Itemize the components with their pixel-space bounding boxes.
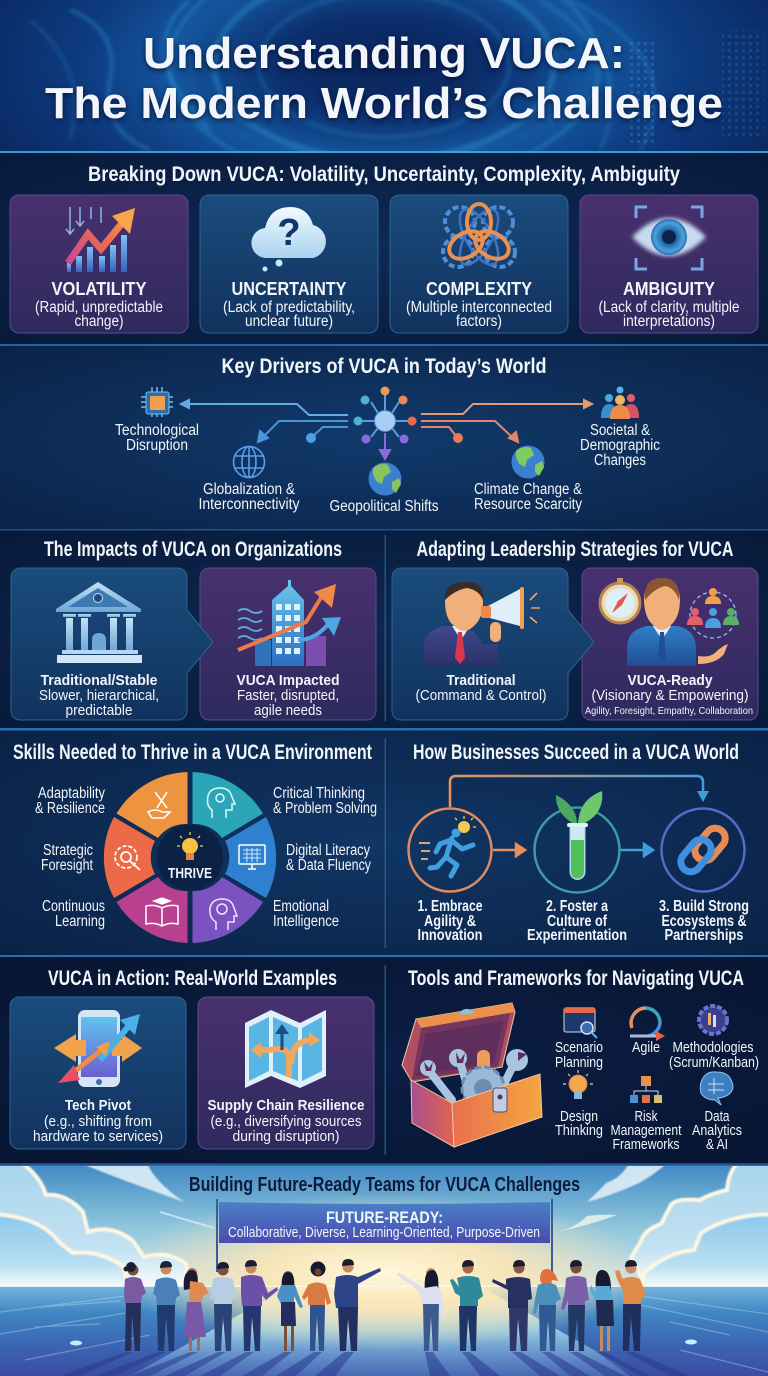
card: supply chain (198, 997, 374, 1149)
title (45, 29, 723, 128)
labels: skills right: & Problem Solving (273, 800, 377, 817)
icon: question cloud: ? (277, 212, 301, 254)
shadows (60, 1352, 690, 1376)
tool: data analytics and AI: Analytics (692, 1123, 742, 1139)
tool: scenario planning: Scenario (555, 1040, 603, 1056)
labels: steps: Partnerships (664, 927, 744, 944)
labels: skills right: & Data Fluency (286, 857, 371, 874)
arrow: loop connector (450, 776, 709, 807)
heading: examples: VUCA in Action: Real-World Examples (48, 966, 337, 990)
label: technological disruption: Technological (115, 422, 199, 439)
card: volatility: (Rapid, unpredictable (35, 299, 163, 316)
tool: risk management: Management (610, 1123, 682, 1139)
card: supply chain: during disruption) (232, 1128, 340, 1145)
tools in box (420, 1049, 528, 1109)
step 1: agility (408, 808, 492, 892)
tool: agile: Agile (632, 1040, 660, 1056)
tool: risk management: Frameworks (612, 1137, 680, 1153)
card: ambiguity: (Lack of clarity, multiple (598, 299, 740, 316)
card: complexity: COMPLEXITY (426, 278, 533, 299)
tool: methodologies (669, 1006, 759, 1071)
card: vuca impacted: Faster, disrupted, (237, 687, 339, 704)
diagram: hub and arrows (181, 386, 592, 459)
labels: skills left: & Resilience (35, 800, 105, 817)
card: traditional stable (11, 568, 213, 720)
labels: steps: 1. Embrace (418, 898, 483, 915)
card: tech pivot: hardware to services) (33, 1128, 163, 1145)
card: ambiguity (580, 195, 758, 333)
heading: breaking down: Breaking Down VUCA: Volatility, Uncertainty, Complexity, Ambiguity (88, 162, 680, 186)
chart: skills wheel: THRIVE (168, 865, 212, 882)
tool: scenario planning (555, 1008, 603, 1071)
heading: key drivers: Key Drivers of VUCA in Today’s World (222, 354, 546, 378)
label: globalization (198, 481, 300, 513)
title: Understanding VUCA: (143, 29, 625, 78)
card: volatility: VOLATILITY (52, 278, 147, 299)
icon: critical thinking (208, 788, 235, 818)
sparkles (70, 1340, 697, 1346)
arrow: step 2 to 3 (620, 844, 653, 856)
tool: data analytics and AI: & AI (706, 1137, 728, 1153)
person 6 (277, 1271, 303, 1351)
icon: chip (141, 387, 173, 417)
card: volatility: change) (74, 313, 124, 330)
card: traditional stable: Traditional/Stable (40, 672, 158, 689)
person 15 (615, 1260, 646, 1351)
panel: future-ready teams (0, 1160, 768, 1376)
card: tech pivot: Tech Pivot (65, 1097, 131, 1114)
icon: learning book (146, 898, 178, 926)
panel: examples and tools (0, 955, 768, 1163)
banner: Collaborative, Diverse, Learning-Oriented, Purpose-Driven (228, 1225, 540, 1241)
tool: data analytics and AI (692, 1072, 742, 1153)
card: traditional stable: predictable (66, 702, 132, 719)
chart: skills wheel (104, 772, 276, 943)
labels: steps (418, 898, 749, 944)
person 2 (153, 1261, 180, 1351)
panel: skills and business (0, 728, 768, 957)
icon: test tube plant (556, 791, 602, 880)
icon: blurred eye (632, 207, 706, 269)
icon: question cloud (251, 207, 326, 272)
labels: skills left (35, 785, 105, 930)
panel: key drivers (0, 344, 768, 530)
labels: steps: Agility & (424, 913, 476, 930)
card: complexity: (Multiple interconnected (406, 299, 552, 316)
card: vuca-ready: (Visionary & Empowering) (592, 687, 749, 704)
arrow: step 1 to 2 (493, 844, 525, 856)
clouds: left (0, 1166, 214, 1286)
label: societal: Societal & (590, 422, 651, 439)
heading: impacts: The Impacts of VUCA on Organizations (44, 537, 342, 561)
icon: interlocked gears (443, 204, 515, 270)
card: tech pivot: (e.g., shifting from (44, 1113, 152, 1130)
label: societal (580, 422, 660, 469)
card: vuca-ready (582, 568, 758, 720)
person 12 (533, 1269, 561, 1351)
tool: agile (630, 1008, 665, 1056)
icon: chain links (677, 824, 729, 876)
title: The Modern World’s Challenge (45, 79, 723, 128)
icon: disrupted tower (238, 580, 341, 666)
icon: emotional brain (210, 899, 237, 930)
banner: FUTURE-READY: (326, 1208, 443, 1227)
card: tech pivot (10, 997, 186, 1149)
label: technological disruption (115, 422, 199, 454)
label: technological disruption: Disruption (126, 437, 188, 454)
icon: rising chart (66, 207, 135, 272)
person 4 (210, 1262, 236, 1351)
icon: leader with megaphone (424, 582, 540, 666)
label: geopolitical shifts: Geopolitical Shifts (330, 498, 439, 515)
card: vuca impacted: VUCA Impacted (236, 672, 340, 689)
label: globalization: Interconnectivity (198, 496, 300, 513)
person 3 (184, 1268, 209, 1351)
card: volatility (10, 195, 188, 333)
person 10 (450, 1260, 483, 1351)
card: vuca-ready: VUCA-Ready (628, 672, 713, 689)
card: traditional command (392, 568, 594, 720)
icon: light bulb (177, 832, 203, 860)
label: climate change (474, 481, 583, 513)
step 2: experimentation (534, 791, 620, 892)
labels: skills right: Critical Thinking (273, 785, 365, 802)
panel: impacts and leadership (0, 529, 768, 729)
banner (217, 1199, 552, 1272)
labels: steps: Experimentation (527, 927, 627, 944)
labels: skills left: Continuous (42, 898, 105, 915)
icon: wire globe (234, 446, 264, 478)
card: complexity (390, 195, 568, 333)
tool: risk management (610, 1076, 682, 1153)
icon: runner (419, 816, 476, 876)
card: vuca impacted: agile needs (254, 702, 322, 719)
label: climate change: Climate Change & (474, 481, 583, 498)
step 3: partnerships (662, 808, 744, 892)
label: societal: Changes (594, 452, 646, 469)
card: supply chain: (e.g., diversifying sources (210, 1113, 362, 1130)
labels: skills left: Adaptability (38, 785, 105, 802)
tool: risk management: Risk (634, 1109, 658, 1125)
labels: steps: 3. Build Strong (659, 898, 749, 915)
card: uncertainty: UNCERTAINTY (232, 278, 347, 299)
labels: steps: Innovation (418, 927, 482, 944)
card: supply chain: Supply Chain Resilience (208, 1097, 364, 1114)
icon: classical building (56, 582, 142, 663)
tool: design thinking (555, 1070, 603, 1139)
card: uncertainty: (Lack of predictability, (223, 299, 355, 316)
icon: map with routes (245, 1010, 326, 1088)
header (0, 0, 768, 185)
label: societal: Demographic (580, 437, 660, 454)
tool: design thinking: Design (560, 1109, 598, 1125)
icon: visionary leader (600, 578, 739, 666)
person 14 (590, 1270, 614, 1351)
card: traditional command: Traditional (446, 672, 516, 689)
person 8 (334, 1259, 381, 1351)
heading: future-ready teams: Building Future-Ready Teams for VUCA Challenges (189, 1174, 580, 1196)
label: globalization: Globalization & (203, 481, 296, 498)
card: traditional command: (Command & Control) (416, 687, 546, 704)
label: climate change: Resource Scarcity (474, 496, 582, 513)
icon: phone with arrows (54, 1010, 142, 1087)
person 5 (241, 1260, 278, 1351)
person 1 (124, 1262, 146, 1351)
tool: scenario planning: Planning (555, 1055, 603, 1071)
icon: adaptability (148, 792, 170, 818)
labels: steps: 2. Foster a (546, 898, 608, 915)
icon: strategic foresight (115, 846, 140, 870)
icon: toolbox (402, 1003, 542, 1147)
icon: people (601, 386, 639, 419)
person 13 (561, 1260, 589, 1351)
icon: earth climate (512, 446, 544, 478)
labels: skills right: Digital Literacy (286, 842, 370, 859)
clouds: right (562, 1166, 768, 1286)
icon: digital literacy (239, 845, 265, 869)
card: complexity: factors) (456, 313, 502, 330)
labels: skills right (273, 785, 377, 930)
heading: skills: Skills Needed to Thrive in a VUCA Environment (13, 740, 372, 764)
tool: methodologies: Methodologies (672, 1040, 754, 1056)
icon: earth geopolitical (368, 462, 402, 496)
card: ambiguity: AMBIGUITY (623, 278, 716, 299)
tool: data analytics and AI: Data (704, 1109, 730, 1125)
labels: skills right: Emotional (273, 898, 329, 915)
labels: steps: Culture of (547, 913, 608, 930)
tool: design thinking: Thinking (555, 1123, 603, 1139)
labels: skills right: Intelligence (273, 913, 339, 930)
person 7 (302, 1262, 331, 1351)
labels: skills left: Strategic (43, 842, 93, 859)
card: traditional stable: Slower, hierarchical, (39, 687, 159, 704)
card: vuca impacted (200, 568, 376, 720)
panel: breaking down VUCA (0, 151, 768, 345)
card: ambiguity: interpretations) (623, 313, 715, 330)
card: uncertainty: unclear future) (245, 313, 333, 330)
labels: steps: Ecosystems & (662, 913, 746, 930)
person 9 (397, 1268, 445, 1351)
card: uncertainty (200, 195, 378, 333)
labels: skills left: Foresight (41, 857, 94, 874)
team of people (124, 1259, 646, 1351)
labels: skills left: Learning (55, 913, 105, 930)
person 11 (492, 1260, 532, 1351)
